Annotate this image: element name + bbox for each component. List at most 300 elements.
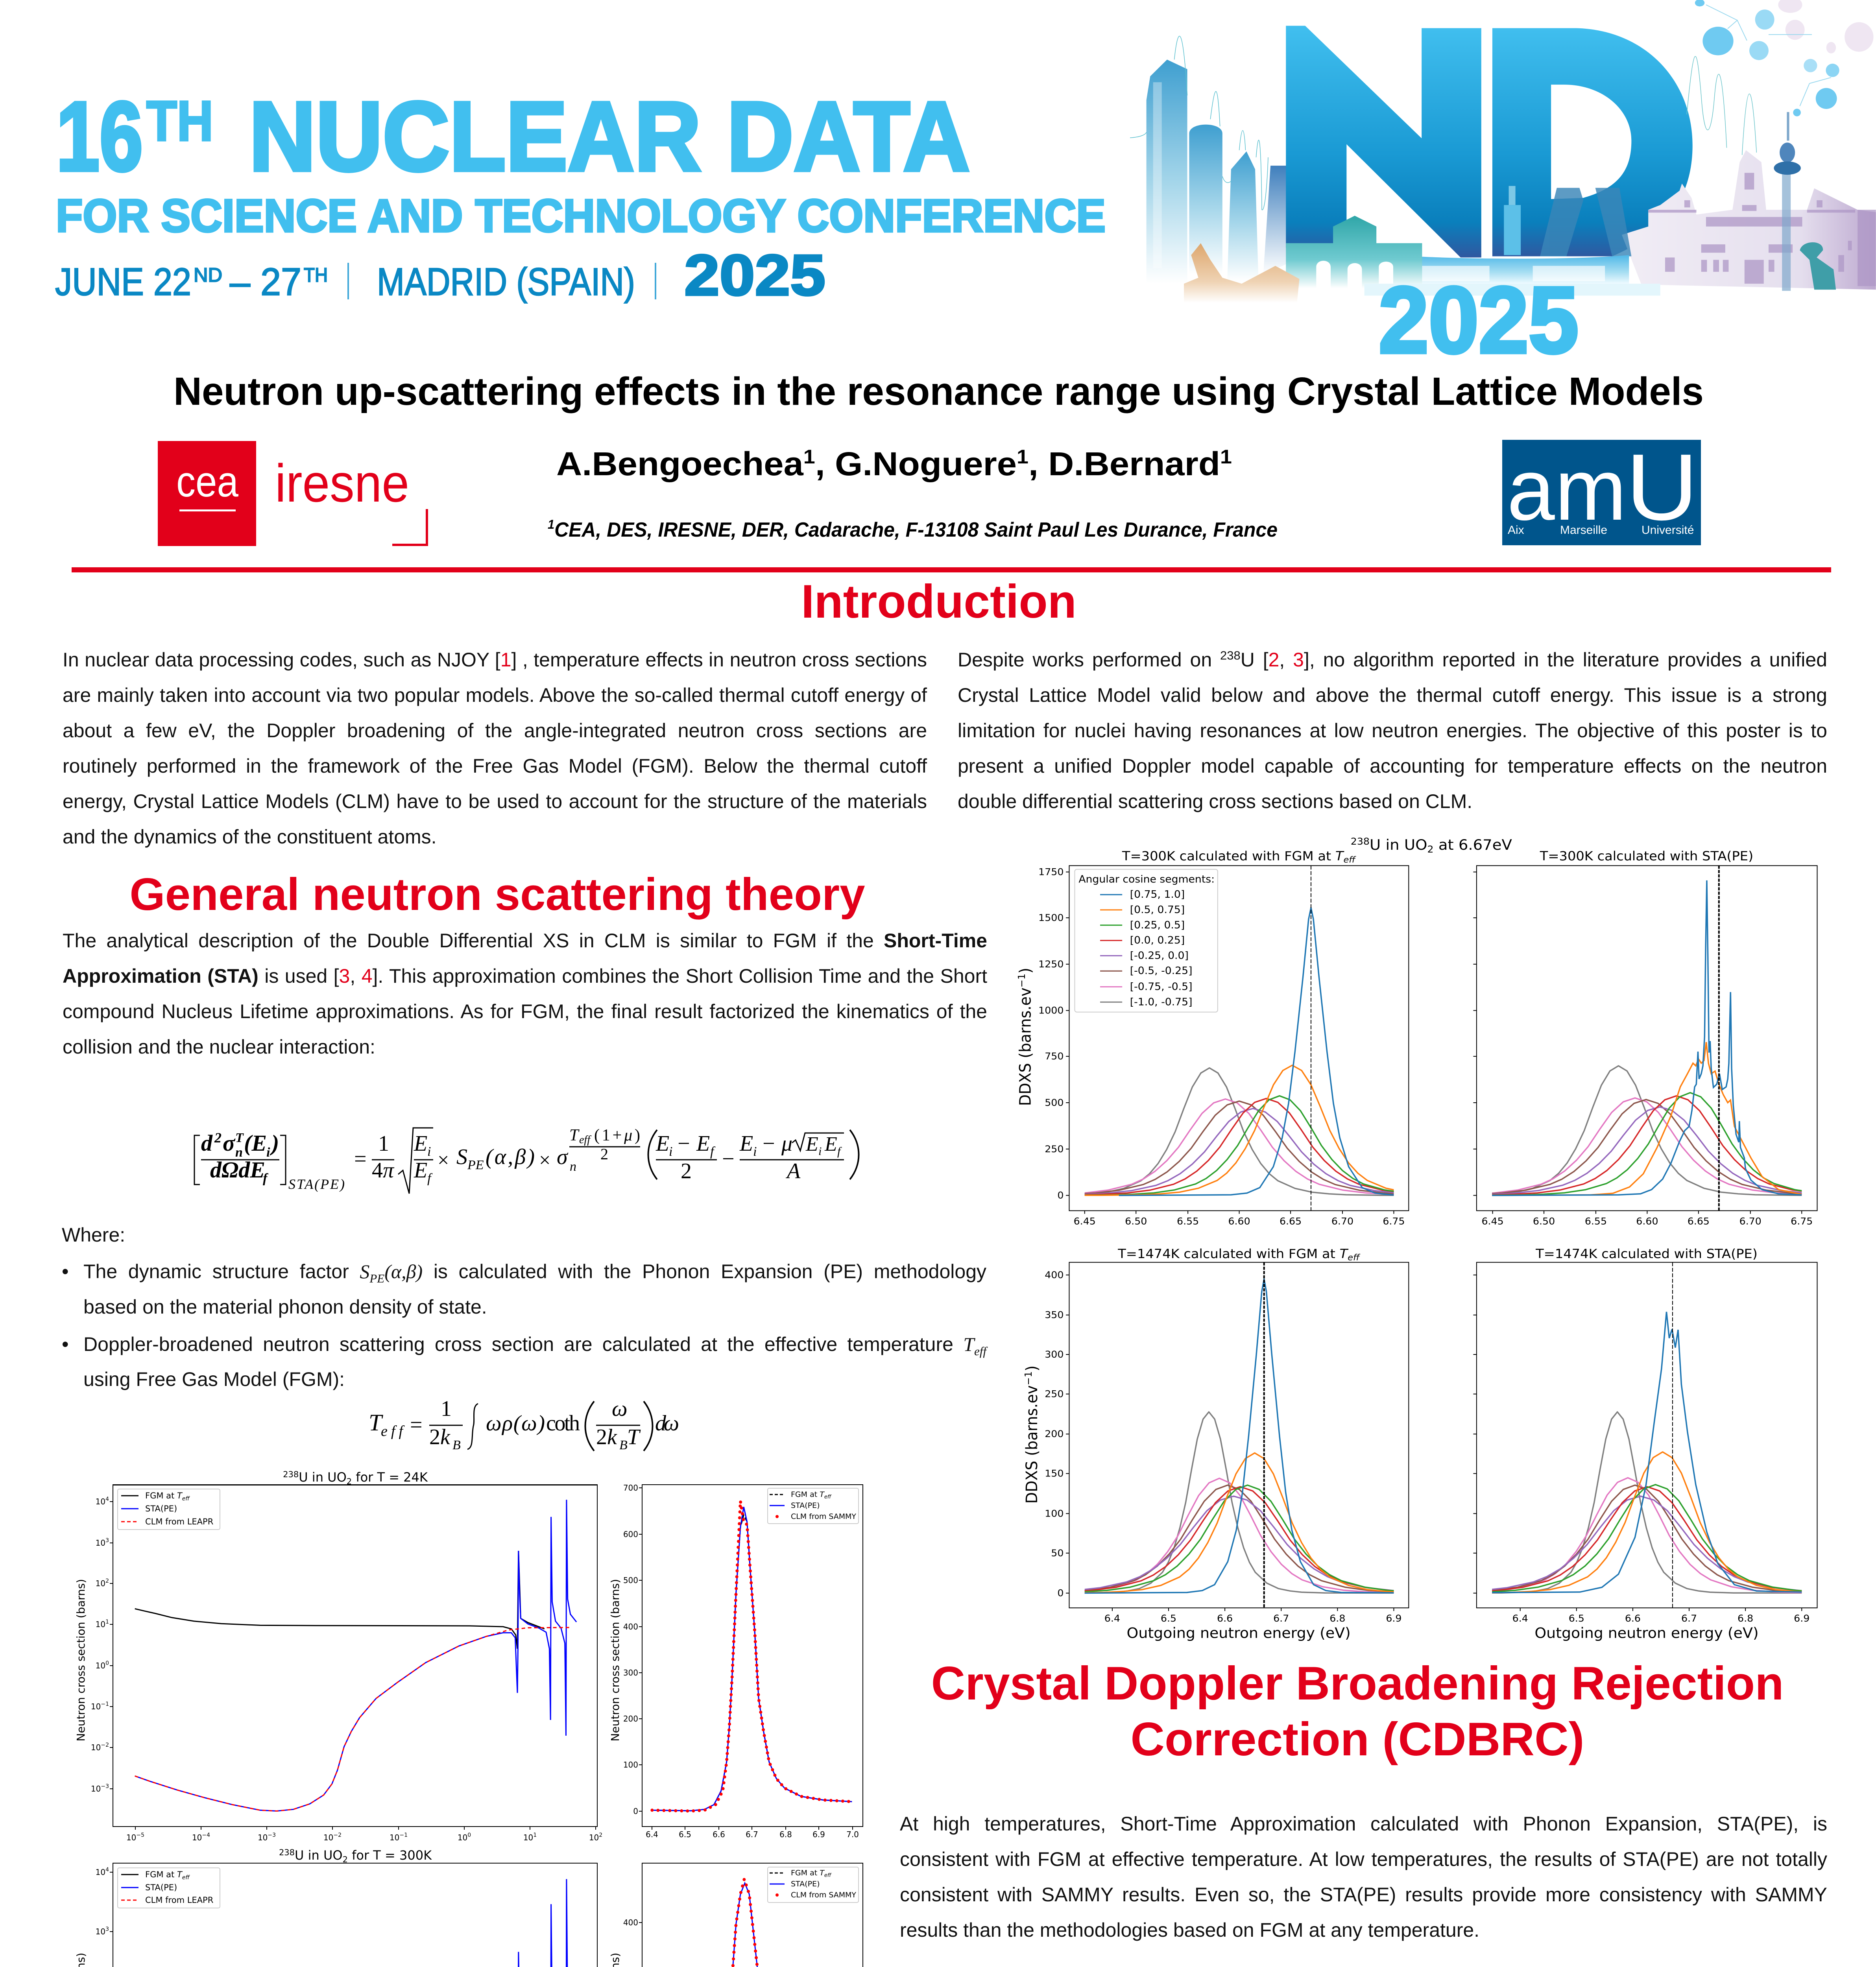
- equation: STA double differential: (1+μ): [594, 1126, 640, 1144]
- equation: STA double differential: σ: [223, 1130, 236, 1156]
- equation: STA double differential: f: [427, 1171, 433, 1186]
- legend: [118, 1868, 220, 1908]
- equation: STA double differential: A: [785, 1159, 801, 1183]
- equation: STA double differential: −: [678, 1131, 690, 1156]
- equation: STA double differential: 4π: [372, 1158, 395, 1183]
- bullet 1: The dynamic structure factor SPE(α,β) is calculated with the Phonon Expansion (PE) methodology: [83, 1260, 986, 1285]
- text: general theory paragraph: compound Nucleus Lifetime approximations. As for FGM, the final result factorized the kinematics of the: [63, 1000, 987, 1022]
- authors: 1: [803, 446, 815, 468]
- legend: angular cosine segments: [-0.25, 0.0]: [1130, 950, 1189, 961]
- panel: T=300K FGM: 6.75: [1383, 1216, 1405, 1227]
- chart: 238U at 24K, left axes: 10: [96, 1579, 105, 1588]
- chart: 238U at 24K, left axes: 4: [105, 1496, 109, 1502]
- chart: 238U at 24K, left axes: 10: [96, 1538, 105, 1548]
- bullet 1: based on the material phonon density of state.: [83, 1296, 487, 1318]
- bear and tree: [1800, 242, 1836, 290]
- panel: T=1474K STA(PE): 6.8: [1738, 1613, 1753, 1624]
- bullet 2: Doppler-broadened neutron scattering cross section are calculated at the effective temperature Teff: [83, 1333, 986, 1358]
- panel: T=300K FGM: eff: [1343, 855, 1356, 865]
- legend: eff: [182, 1875, 190, 1881]
- authors: 1: [1220, 446, 1232, 468]
- text: introduction left column: and the dynamics of the constituent atoms.: [63, 826, 437, 848]
- equation: STA double differential: n: [235, 1145, 243, 1160]
- panel: T=1474K FGM: 6.6: [1217, 1613, 1233, 1624]
- chart: 238U at 24K, left axes: 3: [105, 1537, 109, 1544]
- bullet 2: [62, 1327, 986, 1397]
- equation: STA double differential: i: [427, 1144, 431, 1159]
- authors: , D.Bernard: [1028, 445, 1220, 482]
- panel: T=300K FGM: DDXS (barns.ev: [1016, 987, 1034, 1106]
- N letter: [1286, 26, 1481, 257]
- panel: T=1474K FGM: eff: [1348, 1253, 1360, 1262]
- chart: 238U at 24K, resonance zoom: 400: [623, 1622, 638, 1631]
- equation: STA double differential: eff: [579, 1134, 591, 1146]
- equation: effective temperature: 2k: [429, 1425, 451, 1449]
- chart: 238U at 24K, left axes: −4: [202, 1832, 210, 1838]
- equation: effective temperature: 1: [441, 1397, 452, 1421]
- dates and place: [55, 243, 825, 308]
- equation: effective temperature: T: [627, 1425, 641, 1449]
- equation: STA double differential: σ: [557, 1145, 569, 1169]
- bullet 1: •: [62, 1260, 69, 1282]
- text: CDBRC paragraph 1: consistent with FGM at effective temperature. At low temperatures, the results of STA(PE) are not totally: [900, 1848, 1827, 1870]
- text: CDBRC paragraph 1: At high temperatures, Short-Time Approximation calculated with Phonon Expansion, STA(PE), is: [900, 1813, 1827, 1835]
- equation: STA double differential: 1: [378, 1131, 389, 1156]
- equation: STA double differential: μ: [781, 1131, 792, 1156]
- chart: 238U at 300K, left axes: 2: [343, 1855, 348, 1864]
- legend: angular cosine segments: [-0.5, -0.25]: [1130, 965, 1192, 977]
- text: introduction right column: double differential scattering cross sections based on CLM.: [958, 790, 1472, 812]
- header: conference title: [55, 81, 1106, 308]
- legend: CLM from LEAPR: [145, 1517, 213, 1526]
- authors: 1: [1017, 446, 1028, 468]
- legend: angular cosine segments: [0.5, 0.75]: [1130, 904, 1185, 916]
- panel: T=1474K FGM: 200: [1045, 1428, 1064, 1439]
- panel: T=1474K FGM: [1025, 1249, 1801, 1641]
- legend: angular cosine segments: Angular cosine segments:: [1078, 874, 1215, 885]
- colonnade and monument: [1396, 186, 1629, 284]
- panel: T=1474K FGM: 6.9: [1386, 1613, 1402, 1624]
- panel: T=1474K STA(PE): T=1474K calculated with STA(PE): [1535, 1246, 1758, 1261]
- text: bullet list: [62, 1254, 986, 1397]
- text: introduction right column: Despite works performed on 238U [2, 3], no algorithm reported in the literature provides a unified: [958, 648, 1827, 671]
- chart: 238U at 300K, left axes: for T = 300K: [348, 1848, 432, 1863]
- chart: 238U at 24K, resonance zoom: 500: [623, 1576, 638, 1585]
- logo: CEA IRESNE: cea: [176, 458, 239, 506]
- chart: 238U at 24K, left axes: 10: [390, 1833, 399, 1842]
- heading: CDBRC: [931, 1657, 1784, 1766]
- authors: A.Bengoechea: [556, 445, 786, 482]
- logo: AMU: Aix: [1508, 524, 1524, 537]
- panel: T=300K FGM: ): [1016, 968, 1034, 974]
- dates and place: JUNE 22: [55, 260, 191, 303]
- chart: 238U at 24K, left axes: 10: [126, 1833, 136, 1842]
- chart: 238U at 24K, left axes: −3: [268, 1832, 276, 1838]
- bullet 1: [62, 1254, 986, 1325]
- skyscrapers: [1130, 36, 1291, 284]
- equation: STA double differential: ×: [539, 1149, 550, 1172]
- panel: T=300K FGM: 1250: [1038, 958, 1064, 970]
- panel: T=300K FGM: [1018, 851, 1409, 1225]
- equation: STA double differential: [194, 1126, 859, 1194]
- legend: CLM from LEAPR: [145, 1895, 213, 1905]
- legend: eff: [824, 1873, 832, 1878]
- chart: 238U at 24K, left axes: 2: [599, 1832, 602, 1838]
- panel: T=1474K STA(PE): 6.5: [1569, 1613, 1584, 1624]
- affiliation: 1: [548, 517, 554, 531]
- chart: 238U at 24K, left axes: 10: [96, 1620, 105, 1629]
- equation: effective temperature: =: [410, 1413, 423, 1437]
- panel: T=1474K FGM: 100: [1045, 1508, 1064, 1519]
- figure title: at 6.67eV: [1434, 836, 1512, 853]
- D letter: [1492, 28, 1693, 256]
- chart: 238U at 24K, left axes: −1: [399, 1832, 408, 1838]
- equation: STA double differential: =: [354, 1147, 367, 1171]
- chart: 238U at 24K, resonance zoom: 0: [633, 1806, 638, 1816]
- panel: T=300K FGM: 250: [1045, 1143, 1064, 1155]
- legend: [118, 1489, 220, 1530]
- figure: DDXS four panels: [1018, 838, 1818, 1641]
- legend: FGM at T: [145, 1491, 182, 1500]
- equation: STA double differential: E: [696, 1131, 710, 1156]
- legend: angular cosine segments: [1075, 869, 1218, 1012]
- logo: AMU: [1502, 434, 1701, 545]
- chart: 238U at 24K, left axes: −1: [101, 1701, 109, 1707]
- logo: CEA IRESNE: iresne: [275, 453, 409, 513]
- equation: STA double differential: ): [270, 1130, 279, 1156]
- panel: T=1474K FGM: DDXS (barns.ev: [1023, 1385, 1041, 1504]
- chart: 238U at 24K, left axes: U in UO: [299, 1470, 347, 1485]
- legend: [768, 1867, 859, 1902]
- chart: 238U at 24K, resonance zoom: 6.8: [779, 1830, 792, 1839]
- legend: angular cosine segments: [0.75, 1.0]: [1130, 889, 1185, 900]
- chart: 238U at 24K, resonance zoom: 300: [623, 1668, 638, 1677]
- logo: CEA IRESNE: [158, 441, 427, 546]
- text: introduction left column: energy, Crystal Lattice Models (CLM) have to be used to account for the structure of the materials: [63, 790, 927, 812]
- chart: 238U at 24K, resonance zoom: 6.6: [713, 1830, 725, 1839]
- chart: 238U at 24K, left axes: 238: [283, 1470, 299, 1479]
- dates and place: ND: [194, 264, 222, 286]
- chart: 238U at 24K, left axes: 1: [533, 1832, 537, 1838]
- equation: STA double differential: n: [570, 1159, 576, 1174]
- legend: angular cosine segments: [0.25, 0.5]: [1130, 919, 1185, 931]
- equation: STA double differential: 2: [214, 1130, 222, 1146]
- legend: STA(PE): [791, 1501, 820, 1510]
- chart: 238U at 24K, left axes: −2: [333, 1832, 342, 1838]
- chart: 238U at 300K, left axes: U in UO: [295, 1848, 343, 1863]
- equation: STA double differential: d: [201, 1130, 213, 1156]
- dates and place: 2025: [684, 243, 825, 308]
- 16th nuclear data: NUCLEAR DATA: [249, 81, 970, 191]
- chart: 238U at 300K, left axes: 3: [105, 1926, 109, 1932]
- bullet 2: using Free Gas Model (FGM):: [83, 1368, 345, 1390]
- legend: STA(PE): [791, 1880, 820, 1888]
- figure title: 238: [1351, 836, 1370, 847]
- panel: T=1474K FGM: 0: [1057, 1587, 1064, 1598]
- equation: effective temperature: 2k: [596, 1425, 617, 1449]
- panel: T=300K FGM: 0: [1057, 1190, 1064, 1201]
- equation: effective temperature: coth: [546, 1411, 580, 1436]
- chart: 238U at 24K, left axes: for T = 24K: [352, 1470, 428, 1485]
- figure title: 2: [1427, 843, 1434, 855]
- chart: 238U at 24K, resonance zoom: Neutron cross section (barns): [609, 1579, 622, 1741]
- legend: STA(PE): [145, 1504, 177, 1513]
- panel: T=300K STA(PE): 6.45: [1481, 1216, 1504, 1227]
- equation: STA double differential: i: [669, 1144, 672, 1159]
- text: introduction right column: limitation for nuclei having resonances at low neutron energies. The objective of this poster is to: [958, 720, 1827, 742]
- palace: [1622, 150, 1876, 290]
- equation: effective temperature: ωρ(ω): [486, 1411, 545, 1436]
- logo: AMU: Université: [1642, 524, 1694, 537]
- chart: 238U at 300K, left axes: [74, 1848, 602, 1967]
- panel: T=1474K STA(PE): 6.6: [1625, 1613, 1641, 1624]
- leaning towers: [1540, 188, 1631, 256]
- chart: 238U at 24K, left axes: 10: [96, 1497, 105, 1506]
- panel: T=1474K STA(PE): [998, 1246, 1876, 1641]
- 16th nuclear data: TH: [146, 89, 213, 153]
- equation: STA double differential: E: [805, 1133, 818, 1155]
- equation: STA double differential: E: [739, 1131, 753, 1156]
- atoms decoration: [1687, 0, 1874, 155]
- panel: T=1474K FGM: 6.4: [1104, 1613, 1120, 1624]
- legend: FGM at T: [791, 1869, 824, 1877]
- ND 2025 logo with skyline: [1130, 0, 1876, 373]
- chart: 238U at 24K, left axes: 10: [91, 1702, 101, 1711]
- legend: angular cosine segments: [0.0, 0.25]: [1130, 935, 1185, 946]
- panel: T=1474K STA(PE): 6.7: [1681, 1613, 1697, 1624]
- text: introduction left column: are mainly taken into account via two popular models. Above the so-called thermal cutoff energy of: [63, 684, 927, 706]
- dates and place: – 27: [230, 260, 301, 303]
- panel: T=300K FGM: 6.70: [1331, 1216, 1353, 1227]
- chart: 238U at 300K, left axes: 238: [279, 1848, 295, 1857]
- chart: 238U at 24K, resonance zoom: [609, 1483, 863, 1839]
- panel: T=300K STA(PE): 6.60: [1636, 1216, 1658, 1227]
- equation: STA double differential: −: [722, 1147, 735, 1171]
- legend: angular cosine segments: [-0.75, -0.5]: [1130, 981, 1192, 993]
- dates and place: TH: [304, 264, 328, 286]
- panel: T=1474K STA(PE): 6.4: [1512, 1613, 1528, 1624]
- heading: CDBRC: Crystal Doppler Broadening Rejection: [931, 1657, 1784, 1710]
- panel: T=300K FGM: 6.65: [1280, 1216, 1302, 1227]
- heading: CDBRC: Correction (CDBRC): [1130, 1713, 1584, 1766]
- chart: 238U at 24K, left axes: 0: [467, 1832, 471, 1838]
- equation: STA double differential: f: [837, 1145, 842, 1158]
- chart: 238U at 24K, resonance zoom: 6.7: [746, 1830, 758, 1839]
- equation: effective temperature: dω: [655, 1411, 679, 1436]
- legend: FGM at T: [145, 1870, 182, 1879]
- chart: 238U at 24K, left axes: 0: [105, 1660, 109, 1666]
- radio tower: [1774, 112, 1801, 291]
- text: where: Where:: [62, 1224, 125, 1246]
- panel: T=1474K FGM: 6.5: [1161, 1613, 1176, 1624]
- chart: 238U at 300K, left axes: 10: [96, 1867, 105, 1877]
- poster title: Neutron up-scattering effects in the resonance range using Crystal Lattice Models: [174, 369, 1704, 413]
- equation: effective temperature: eff: [381, 1423, 404, 1439]
- panel: T=1474K FGM: 300: [1045, 1349, 1064, 1360]
- panel: T=1474K STA(PE): Outgoing neutron energy (eV): [1534, 1625, 1759, 1641]
- panel: T=1474K FGM: Outgoing neutron energy (eV): [1127, 1625, 1351, 1641]
- text: introduction left column: about a few eV, the Doppler broadening of the angle-integrated neutron cross sections are: [63, 720, 927, 742]
- panel: T=1474K FGM: 350: [1045, 1309, 1064, 1320]
- equation: STA double differential: 2: [600, 1145, 608, 1163]
- chart: 238U at 300K, resonance zoom: 400: [623, 1918, 638, 1927]
- panel: T=300K FGM: T=300K calculated with FGM at T: [1122, 849, 1343, 864]
- text: introduction right column: present a unified Doppler model capable of accounting for temperature effects on the neutron: [958, 755, 1827, 777]
- panel: T=300K STA(PE): [1473, 851, 1818, 1225]
- equation: STA double differential: E: [824, 1133, 837, 1155]
- chart: 238U at 300K, left axes: 10: [96, 1927, 105, 1936]
- panel: T=1474K FGM: 6.8: [1329, 1613, 1345, 1624]
- equation: STA double differential: i: [818, 1145, 822, 1158]
- chart: 238U at 24K, left axes: 10: [96, 1661, 105, 1670]
- chart: 238U at 24K, resonance zoom: 200: [623, 1714, 638, 1723]
- equation: effective temperature: T: [369, 1410, 383, 1436]
- panel: T=300K FGM: 6.50: [1125, 1216, 1147, 1227]
- panel: T=300K FGM: 500: [1045, 1097, 1064, 1108]
- text: introduction right column: Crystal Lattice Model valid below and above the thermal cutoff energy. This issue is a strong: [958, 684, 1827, 706]
- text: introduction right column: [958, 642, 1827, 819]
- panel: T=1474K FGM: 400: [1045, 1269, 1064, 1281]
- panel: T=1474K FGM: 250: [1045, 1388, 1064, 1399]
- equation: STA double differential: i: [266, 1145, 270, 1160]
- text: general theory paragraph: The analytical description of the Double Differential XS in CLM is similar to FGM if the Short-Time: [63, 930, 987, 952]
- panel: T=300K FGM: 1500: [1038, 912, 1064, 923]
- bullet 2: •: [62, 1333, 69, 1355]
- legend: CLM from SAMMY: [791, 1512, 856, 1521]
- triumphal arch: [1286, 216, 1422, 288]
- panel: T=300K FGM: −1: [1016, 974, 1027, 987]
- panel: T=300K FGM: 6.45: [1074, 1216, 1096, 1227]
- panel: T=1474K FGM: 6.7: [1273, 1613, 1289, 1624]
- equation: STA double differential: STA(PE): [288, 1176, 345, 1192]
- chart: 238U at 24K, resonance zoom: 6.4: [646, 1830, 658, 1839]
- divider rule: [72, 567, 1831, 572]
- chart: 238U at 300K, resonance zoom: [609, 1863, 863, 1967]
- equation: STA double differential: −: [763, 1131, 775, 1156]
- logo year: 2025: [1379, 268, 1579, 373]
- panel: T=1474K STA(PE): 6.9: [1794, 1613, 1810, 1624]
- chart: 238U at 24K, left axes: 10: [589, 1833, 599, 1842]
- panel: T=1474K FGM: 150: [1045, 1468, 1064, 1479]
- text: general theory paragraph: Approximation (STA) is used [3, 4]. This approximation combines the Short Collision Time and the Short: [63, 965, 987, 987]
- logo: AMU: am: [1507, 441, 1627, 539]
- legend: FGM at T: [791, 1490, 824, 1499]
- chart: 238U at 24K, resonance zoom: 6.9: [812, 1830, 825, 1839]
- logo: AMU: U: [1626, 434, 1698, 540]
- equation: STA double differential: E: [414, 1158, 427, 1183]
- chart: 238U at 24K, left axes: 10: [323, 1833, 333, 1842]
- text: CDBRC paragraph 1: consistent with SAMMY results. Even so, the STA(PE) results provide more consistency with SAMMY: [900, 1884, 1827, 1906]
- panel: T=1474K FGM: −1: [1023, 1371, 1034, 1385]
- chart: 238U at 24K, left axes: 2: [347, 1477, 352, 1486]
- equation: STA double differential: PE: [467, 1158, 484, 1172]
- heading: Introduction: Introduction: [801, 575, 1076, 628]
- equation: STA double differential: (E: [244, 1130, 267, 1156]
- panel: T=300K STA(PE): 6.75: [1791, 1216, 1813, 1227]
- text: general theory paragraph: collision and the nuclear interaction:: [63, 1036, 375, 1058]
- heading: general theory: General neutron scattering theory: [129, 869, 865, 920]
- chart: 238U at 24K, left axes: Neutron cross section (barns): [74, 1579, 87, 1741]
- chart: 238U at 24K, left axes: −3: [101, 1783, 109, 1790]
- chart: 238U at 24K, left axes: 10: [91, 1743, 101, 1752]
- chart: 238U at 24K, left axes: 10: [91, 1784, 101, 1794]
- legend: CLM from SAMMY: [791, 1891, 856, 1899]
- legend: STA(PE): [145, 1883, 177, 1892]
- equation: STA double differential: T: [235, 1131, 244, 1145]
- equation: STA double differential: S: [456, 1145, 467, 1169]
- equation: effective temperature: ω: [612, 1397, 628, 1421]
- equation: STA double differential: f: [263, 1171, 269, 1186]
- panel: T=1474K FGM: ): [1023, 1365, 1041, 1371]
- chart: 238U at 24K, resonance zoom: 700: [623, 1483, 638, 1493]
- text: CDBRC paragraph 1: results than the methodologies based on FGM at any temperature.: [900, 1919, 1479, 1941]
- text: introduction left column: [63, 642, 927, 854]
- equation: STA double differential: ×: [438, 1149, 449, 1172]
- chart: 238U at 24K, left axes: [74, 1470, 602, 1842]
- equation: STA double differential: E: [655, 1131, 669, 1156]
- panel: T=300K FGM: 750: [1045, 1051, 1064, 1062]
- legend: eff: [824, 1494, 832, 1500]
- chart: 238U at 24K, resonance zoom: 100: [623, 1760, 638, 1770]
- chart: 238U at 24K, left axes: −5: [136, 1832, 144, 1838]
- rocks: [1184, 243, 1300, 303]
- panel: T=300K STA(PE): T=300K calculated with STA(PE): [1540, 849, 1753, 864]
- panel: T=300K STA(PE): 6.55: [1585, 1216, 1607, 1227]
- 2025 base glow: [1365, 284, 1660, 295]
- dates and place: MADRID (SPAIN): [377, 260, 635, 303]
- text: introduction left column: routinely performed in the framework of the Free Gas Model (FGM). Below the thermal cutoff: [63, 755, 927, 777]
- chart: 238U at 24K, resonance zoom: 6.5: [679, 1830, 691, 1839]
- panel: T=300K FGM: 1000: [1038, 1005, 1064, 1016]
- panel: T=300K FGM: 6.55: [1177, 1216, 1199, 1227]
- panel: T=300K STA(PE): 6.70: [1739, 1216, 1762, 1227]
- legend: angular cosine segments: [-1.0, -0.75]: [1130, 996, 1192, 1008]
- chart: 238U at 24K, left axes: 2: [105, 1578, 109, 1584]
- chart: 238U at 300K, left axes: 4: [105, 1867, 109, 1873]
- figure title: U in UO: [1370, 836, 1427, 853]
- chart: 238U at 24K, left axes: 1: [105, 1619, 109, 1625]
- panel: T=1474K FGM: 50: [1051, 1547, 1064, 1559]
- legend: [768, 1488, 859, 1524]
- panel: T=1474K FGM: T=1474K calculated with FGM at T: [1118, 1246, 1348, 1261]
- text: introduction left column: In nuclear data processing codes, such as NJOY [1] , temperature effects in neutron cross sections: [63, 649, 927, 671]
- affiliation: CEA, DES, IRESNE, DER, Cadarache, F-13108 Saint Paul Les Durance, France: [554, 519, 1278, 541]
- equation: STA double differential: T: [569, 1126, 580, 1144]
- equation: STA double differential: 2: [681, 1159, 692, 1183]
- panel: T=300K FGM: 6.60: [1228, 1216, 1250, 1227]
- 16th nuclear data: 16: [56, 81, 143, 191]
- chart: 238U at 24K, left axes: 10: [192, 1833, 202, 1842]
- equation: STA double differential: (α,β): [486, 1145, 535, 1169]
- equation: STA double differential: dΩdE: [210, 1157, 265, 1183]
- equation: effective temperature: [369, 1397, 679, 1452]
- logo: AMU: Marseille: [1560, 524, 1607, 537]
- authors: , G.Noguere: [815, 445, 1017, 482]
- subtitle: FOR SCIENCE AND TECHNOLOGY CONFERENCE: [56, 190, 1106, 242]
- equation: effective temperature: B: [452, 1438, 461, 1452]
- chart: 238U at 24K, left axes: 10: [523, 1833, 533, 1842]
- text: CDBRC paragraph 1: [900, 1806, 1827, 1948]
- chart: 238U at 24K, left axes: 10: [258, 1833, 268, 1842]
- equation: STA double differential: i: [753, 1144, 757, 1159]
- equation: STA double differential: f: [710, 1144, 716, 1159]
- equation: effective temperature: B: [619, 1438, 628, 1452]
- panel: T=300K FGM: 1750: [1038, 866, 1064, 877]
- text: general theory paragraph: [63, 923, 987, 1065]
- chart: 238U at 24K, left axes: −2: [101, 1742, 109, 1748]
- chart: 238U at 24K, resonance zoom: 7.0: [846, 1830, 859, 1839]
- panel: T=300K STA(PE): 6.65: [1688, 1216, 1710, 1227]
